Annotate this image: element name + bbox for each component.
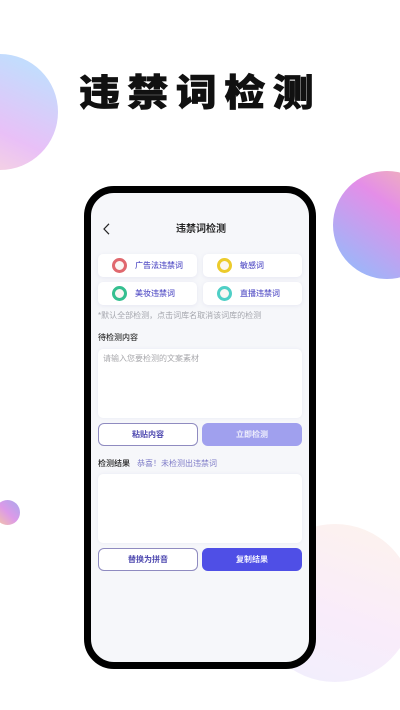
red ring icon [112,258,127,273]
decorative circle: right [333,171,400,279]
option: beauty words [98,282,197,305]
option: ad law words [98,254,197,277]
yellow ring icon [217,258,232,273]
button: paste: 粘贴内容 [132,430,164,439]
button: paste [98,423,198,446]
option: sensitive words [203,254,302,277]
result box [98,474,302,543]
result heading: 检测结果 [98,459,130,468]
screen title: 违禁词检测 [176,224,226,235]
button: pinyin [98,548,198,571]
green ring icon [112,286,127,301]
decorative circle: small left [0,500,20,525]
label: 广告法违禁词 [135,261,183,270]
decorative circle: bottom right [256,524,400,682]
title: 违禁词检测 [79,72,321,114]
placeholder: 请输入您要检测的文案素材 [103,354,199,363]
decorative circle: top left [0,54,58,170]
back arrow icon [103,223,110,235]
option: livestream words [203,282,302,305]
button: pinyin: 替换为拼音 [128,555,168,564]
button: copy [202,548,302,571]
input heading: 待检测内容 [98,333,138,342]
button: detect now: 立即检测 [236,430,268,439]
button: detect now [202,423,302,446]
teal ring icon [217,286,232,301]
label: 敏感词 [240,261,264,270]
result message: 恭喜！未检测出违禁词 [137,459,217,468]
hint text: *默认全部检测，点击词库名取消该词库的检测 [98,311,261,320]
input box [98,349,302,418]
phone mockup [84,186,316,669]
label: 直播违禁词 [240,289,280,298]
label: 美妆违禁词 [135,289,175,298]
button: copy: 复制结果 [236,555,268,564]
